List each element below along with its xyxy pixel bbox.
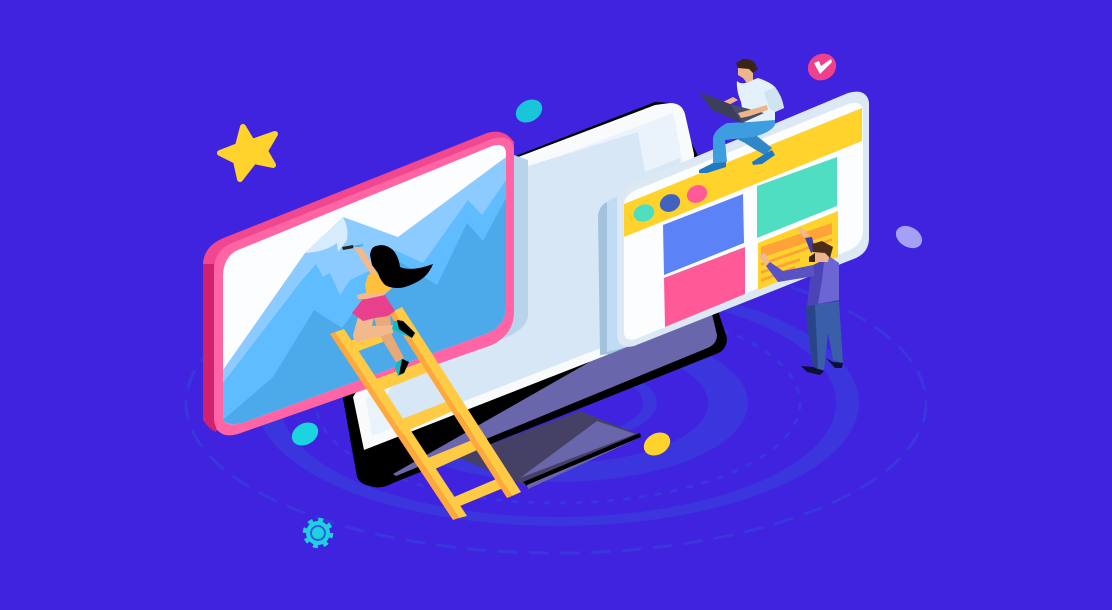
top xyxy=(365,272,392,297)
ladder left rail xyxy=(330,332,459,520)
mountain near layer xyxy=(223,198,506,424)
skirt xyxy=(352,295,395,321)
blue card xyxy=(663,194,744,275)
painting arm xyxy=(353,247,377,276)
far shoe xyxy=(752,150,775,165)
icon: gear xyxy=(304,520,332,546)
orange text lines xyxy=(761,223,832,282)
shoes xyxy=(801,366,824,375)
hair xyxy=(736,59,758,73)
far leg xyxy=(733,133,772,155)
yellow card xyxy=(758,211,838,290)
window title bar xyxy=(624,108,862,237)
extended arm xyxy=(766,262,815,282)
shadow of the painting panel xyxy=(330,150,528,394)
bent leg xyxy=(353,316,393,342)
near shoe xyxy=(699,162,726,173)
hair xyxy=(812,241,833,258)
paint brush xyxy=(342,245,354,250)
raised arm xyxy=(805,237,815,253)
figure: woman painting xyxy=(342,244,433,376)
figure: man with beard xyxy=(758,227,843,375)
ladder right rail xyxy=(389,311,512,498)
beard xyxy=(809,253,815,262)
window rim xyxy=(617,92,869,347)
icon: check badge xyxy=(803,48,841,86)
monitor screen face xyxy=(384,132,690,427)
extended hand xyxy=(758,253,770,265)
decor: cyan oval xyxy=(288,418,322,450)
panel: painting frame xyxy=(203,132,514,435)
window face xyxy=(624,103,863,340)
canvas sky xyxy=(223,145,506,424)
monitor stand xyxy=(457,411,641,489)
laptop screen xyxy=(699,92,742,123)
raised shoe xyxy=(392,321,415,338)
monitor chin xyxy=(393,314,717,476)
decor: yellow oval xyxy=(640,428,674,460)
torso xyxy=(807,257,839,306)
snow cap xyxy=(305,217,348,253)
face xyxy=(738,68,753,83)
monitor black casing xyxy=(342,102,727,487)
laptop keyboard xyxy=(730,104,764,123)
trousers shade xyxy=(806,305,818,368)
monitor white bezel xyxy=(353,103,700,450)
panel: website window xyxy=(598,92,869,355)
hair xyxy=(370,245,433,288)
shirt xyxy=(737,78,784,125)
figure: man with laptop xyxy=(699,59,784,173)
waist arm xyxy=(357,288,392,299)
face xyxy=(813,250,830,262)
frame side xyxy=(203,132,514,434)
pink card xyxy=(664,247,745,327)
decor: lilac oval xyxy=(892,221,926,253)
raised hand xyxy=(798,227,810,238)
monitor lighter screen area xyxy=(366,113,690,436)
ladder rungs xyxy=(350,329,513,506)
window buttons xyxy=(631,182,710,225)
far forearm xyxy=(723,97,738,106)
ladder xyxy=(330,307,521,520)
lower shoe xyxy=(395,358,409,376)
window side shadow xyxy=(598,197,627,355)
trousers xyxy=(806,301,843,370)
frame front xyxy=(214,137,514,435)
shirt shade xyxy=(764,87,784,112)
mountain far layer xyxy=(223,157,506,424)
icon: star xyxy=(220,127,275,179)
decor: teal oval xyxy=(512,95,546,127)
floor rings xyxy=(186,253,926,553)
mountain middle layer xyxy=(223,180,506,424)
teal card xyxy=(757,157,837,238)
near hand xyxy=(738,105,768,118)
lifted leg lower xyxy=(374,315,405,362)
monitor xyxy=(330,102,727,487)
near leg xyxy=(713,120,775,163)
